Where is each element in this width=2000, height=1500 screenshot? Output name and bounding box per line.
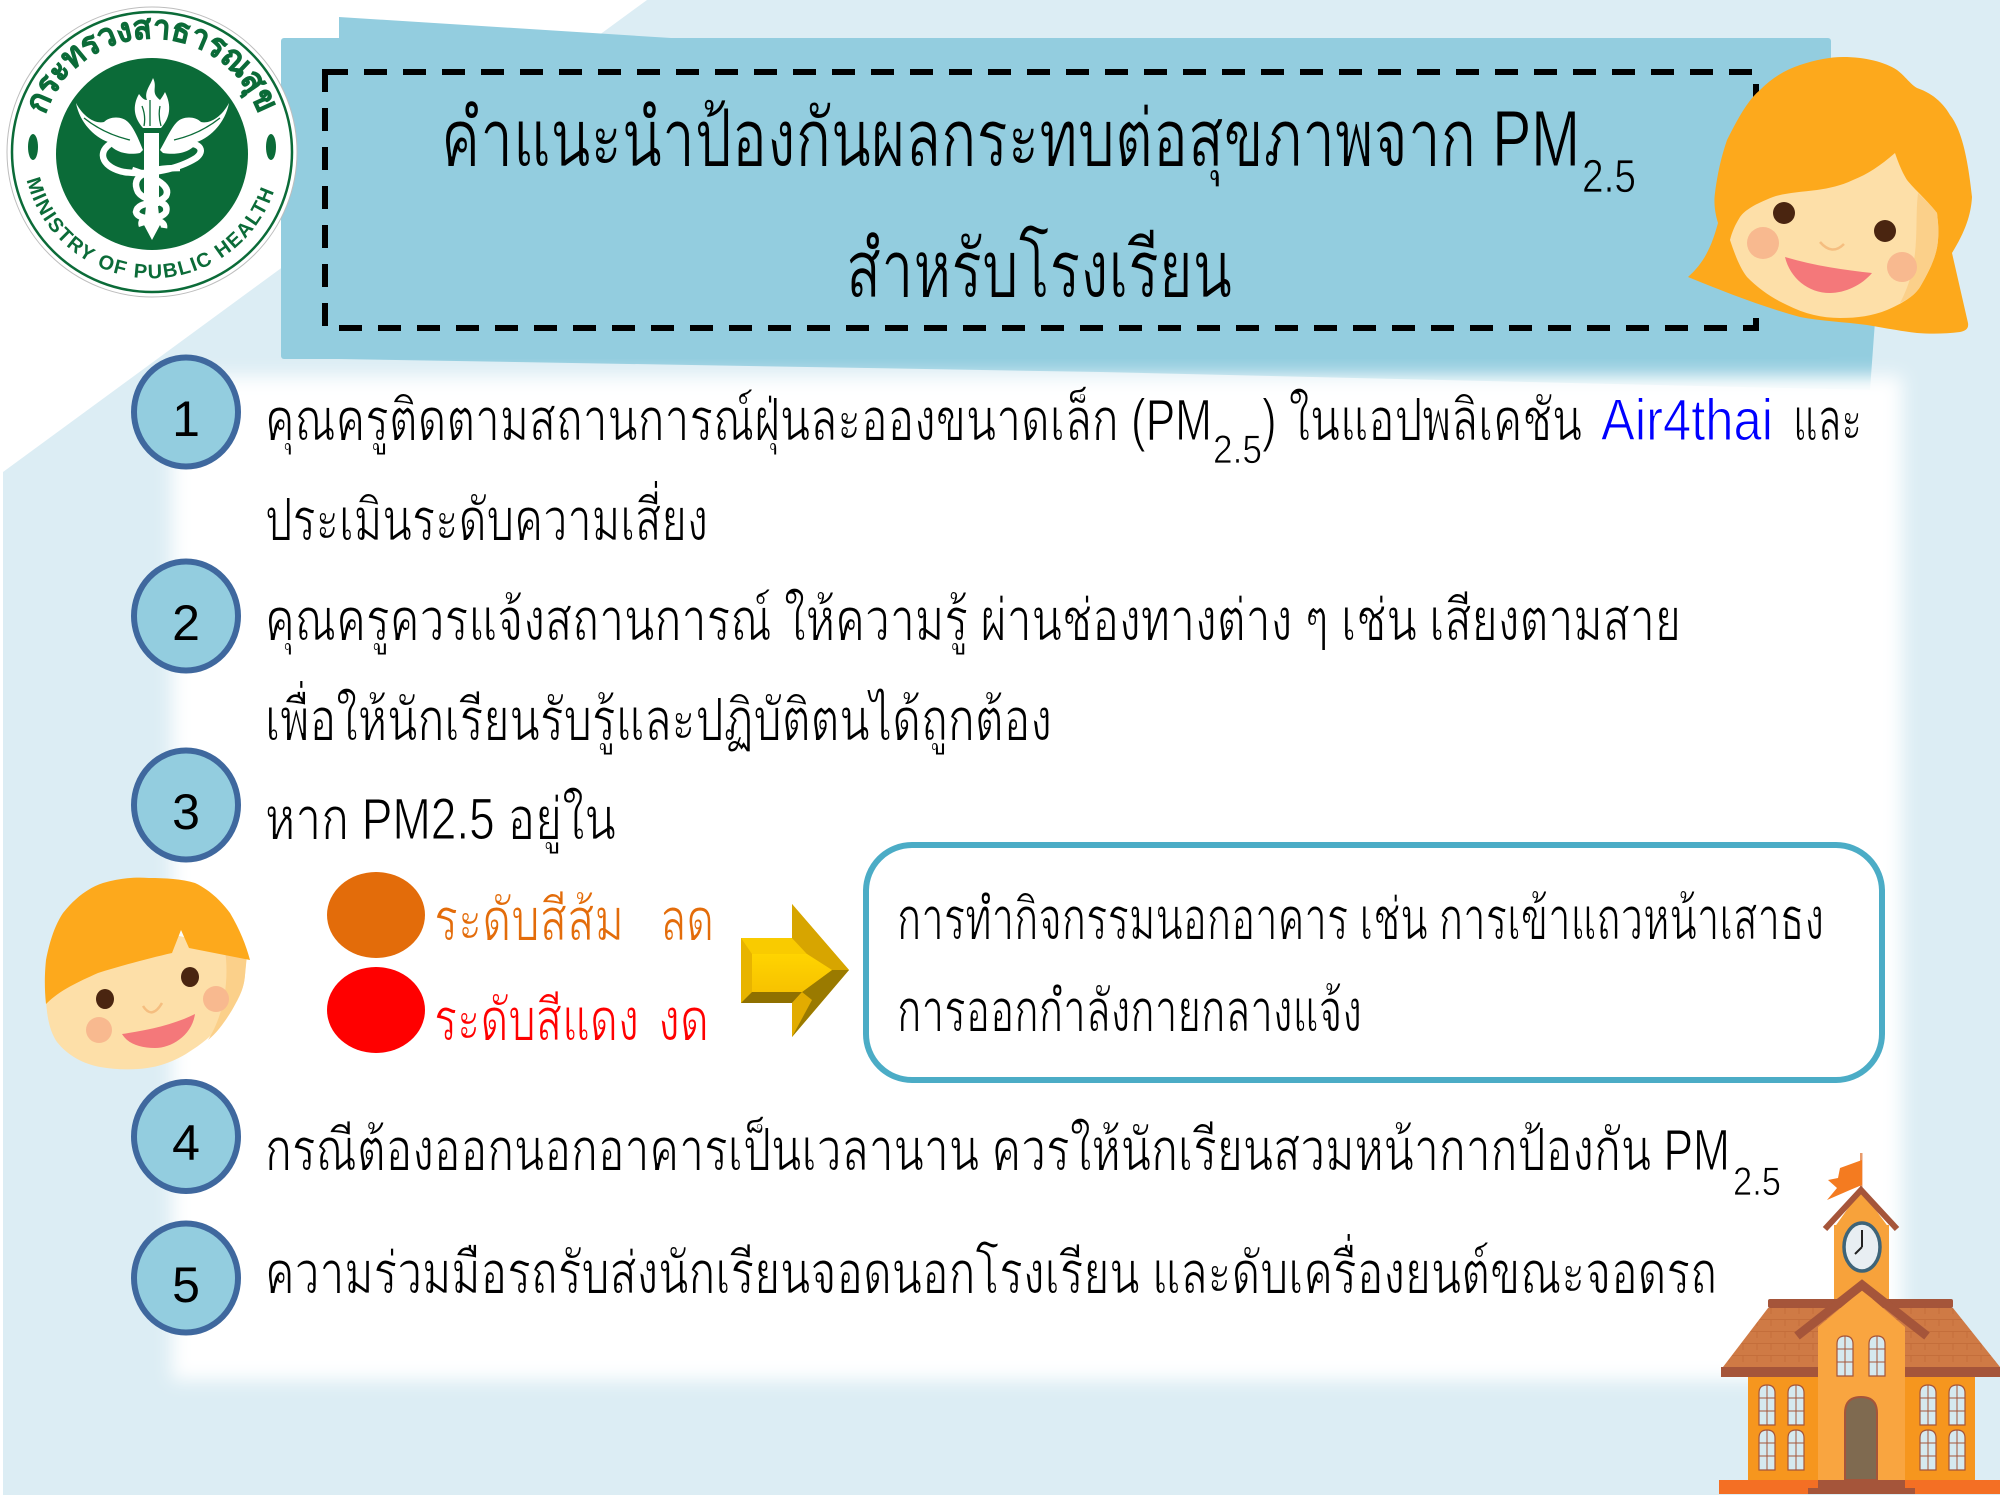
step 1 text: Air4thai <box>1601 388 1773 453</box>
orange level label: ระดับสีส้ม <box>434 888 624 953</box>
step 2 badge: 2 <box>172 595 200 651</box>
step 3 text: หาก PM2.5 อยู่ใน <box>265 786 616 854</box>
step 1 text: และ <box>1793 388 1862 453</box>
title: คำแนะนำป้องกันผลกระทบต่อสุขภาพจาก PM <box>441 94 1580 187</box>
red level marker <box>327 967 425 1053</box>
step 1 text: คุณครูติดตามสถานการณ์ฝุ่นละอองขนาดเล็ก (PM <box>265 386 1212 456</box>
action box text <box>897 887 1824 1044</box>
arrow <box>741 904 849 1037</box>
step 5 badge: 5 <box>172 1257 200 1313</box>
step 1 text: ) ในแอปพลิเคชัน <box>1262 387 1582 453</box>
red level label: ระดับสีแดง <box>434 988 639 1053</box>
step 2 badge <box>134 562 238 670</box>
white content panel <box>172 376 1902 1380</box>
header back sheet <box>339 17 1890 390</box>
title: สำหรับโรงเรียน <box>846 224 1232 314</box>
step 1 badge: 1 <box>172 391 200 447</box>
step 4 text <box>265 1116 1781 1204</box>
step 2 text <box>265 587 1681 755</box>
step 3 badge <box>134 750 238 860</box>
icon: boy face <box>45 878 250 1069</box>
header panel <box>281 38 1831 359</box>
orange level marker <box>327 872 425 958</box>
dashed title frame <box>325 72 1756 328</box>
step 3 badge: 3 <box>172 784 200 840</box>
red level label: งด <box>658 988 709 1053</box>
rounded action box <box>866 845 1882 1080</box>
step 2 text: เพื่อให้นักเรียนรับรู้และปฏิบัติตนได้ถูกต้อง <box>265 680 1052 755</box>
logo: Ministry of Public Health: กระทรวงสาธารณสุข <box>30 18 276 114</box>
step 4 text: 2.5 <box>1733 1160 1781 1204</box>
icon: school building <box>1719 1153 2000 1494</box>
logo: Ministry of Public Health <box>6 6 298 298</box>
action box text: การออกกำลังกายกลางแจ้ง <box>897 979 1362 1044</box>
step 4 badge: 4 <box>172 1115 200 1171</box>
title: 2.5 <box>1582 150 1636 202</box>
logo: Ministry of Public Health: MINISTRY OF PUBLIC HEALTH <box>26 177 274 278</box>
step 1 text: 2.5 <box>1213 428 1262 472</box>
icon: girl face <box>1688 57 1972 334</box>
step 5 badge <box>134 1224 238 1332</box>
title <box>441 94 1636 314</box>
orange level label: ลด <box>660 888 714 953</box>
step 1 text: ประเมินระดับความเสี่ยง <box>265 480 708 553</box>
step 1 badge <box>134 358 238 466</box>
step 4 badge <box>134 1082 238 1191</box>
step 1 text <box>265 386 1862 553</box>
